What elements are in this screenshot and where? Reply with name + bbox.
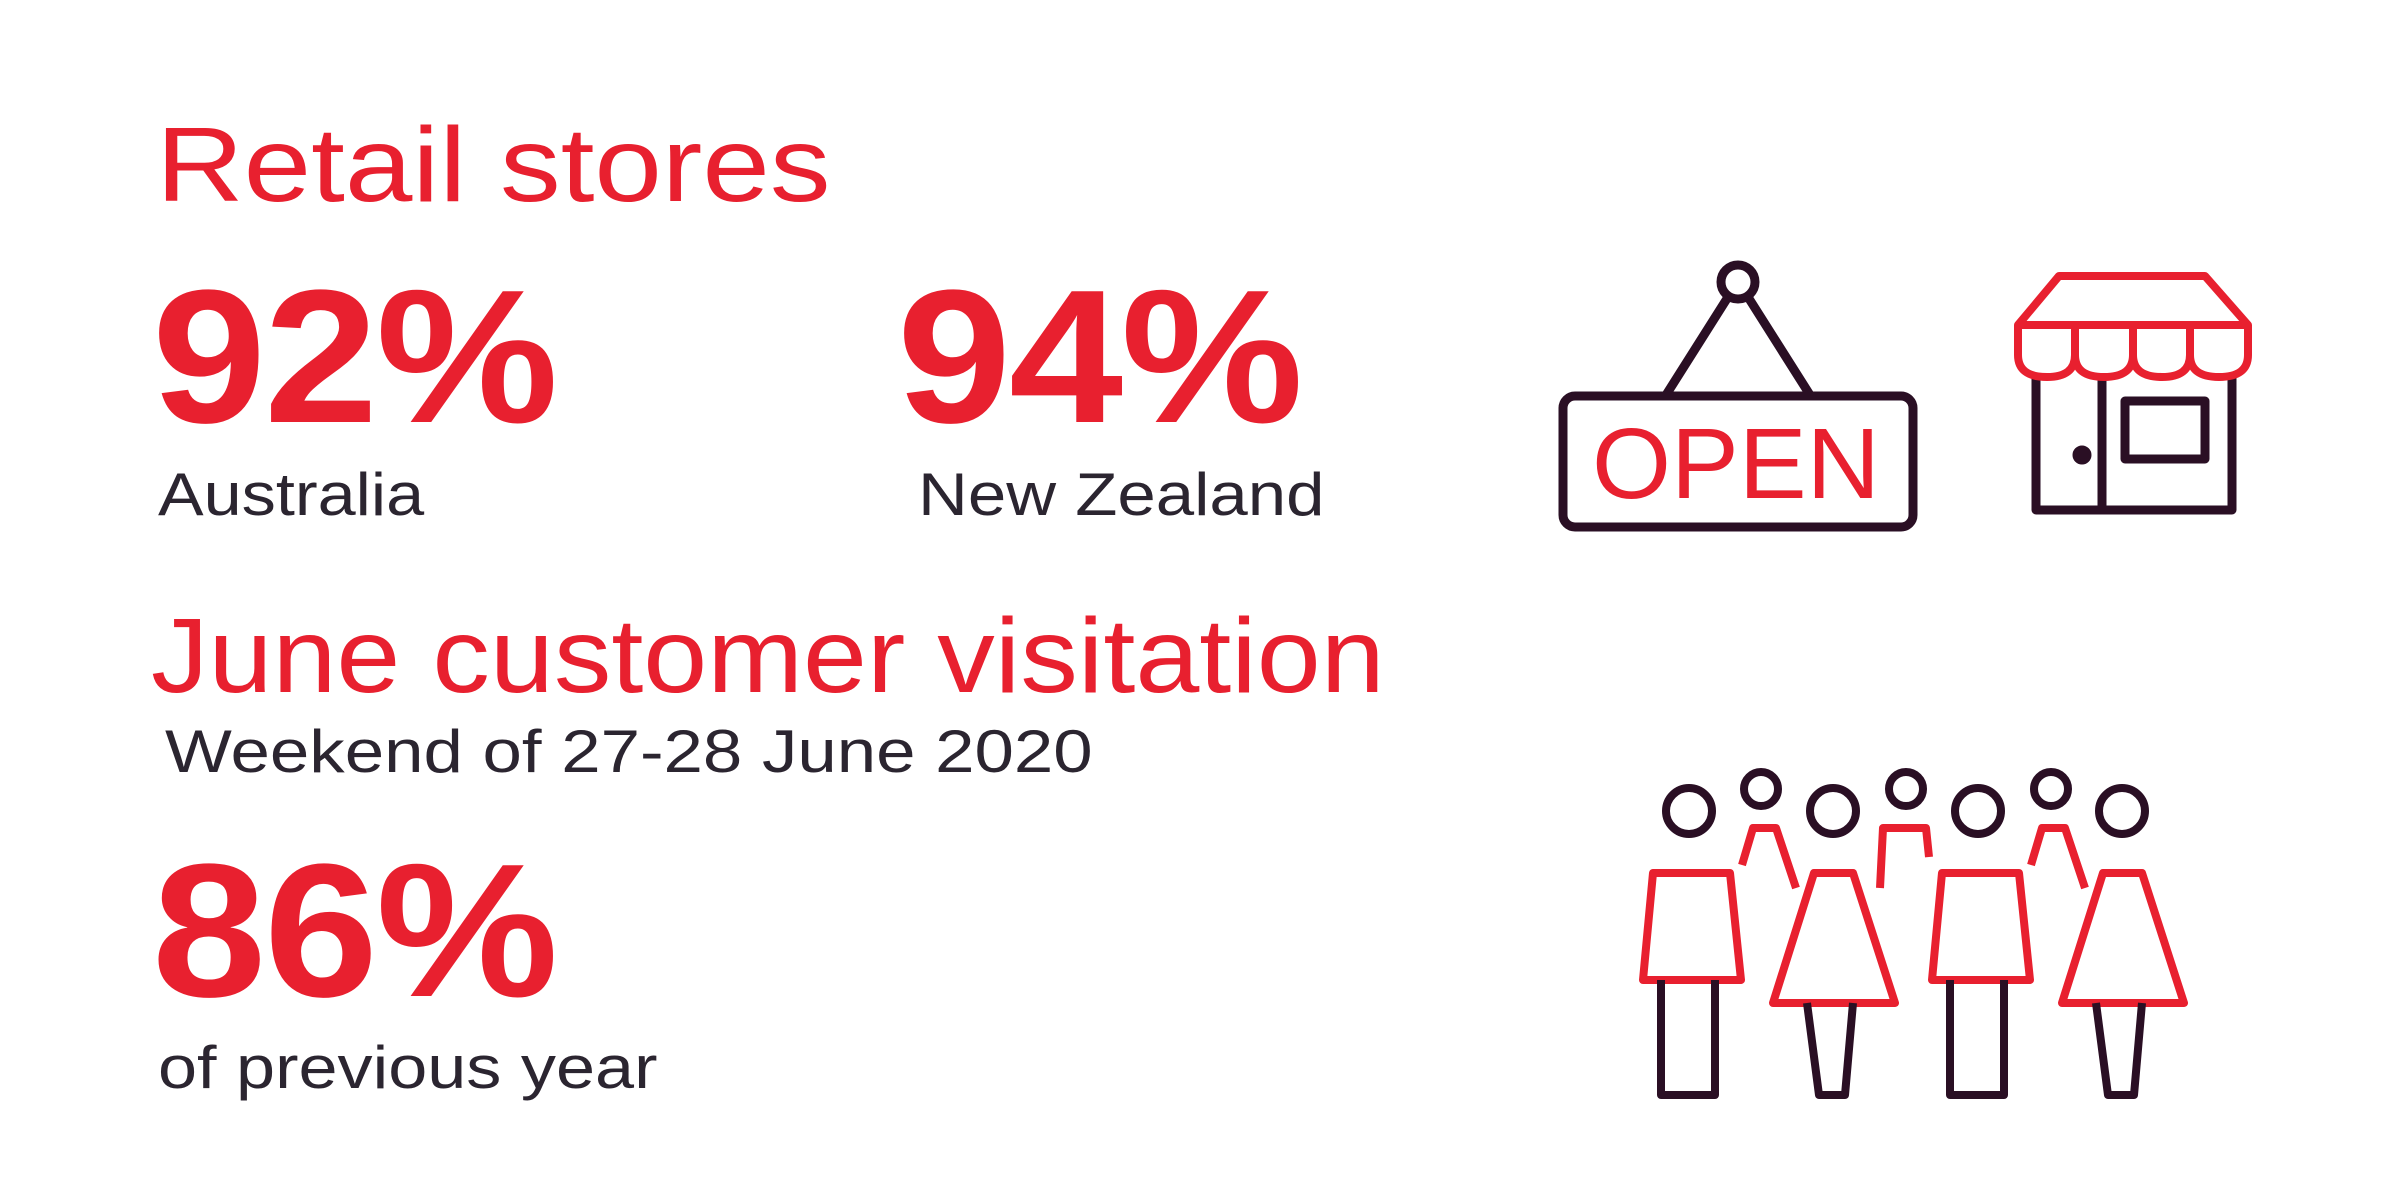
icon: open sign: OPEN: [1592, 408, 1880, 520]
icon: open sign: [1558, 260, 1918, 532]
label of previous year: of previous year: [158, 1034, 657, 1101]
stat: 86% of previous year: [152, 825, 657, 1101]
label Australia: Australia: [158, 461, 424, 528]
stat: New Zealand 94%: [897, 251, 1325, 528]
number 94%: 94%: [897, 251, 1301, 463]
subheading: weekend date: Weekend of 27-28 June 2020: [165, 718, 1093, 785]
label New Zealand: New Zealand: [918, 461, 1325, 528]
heading: June customer visitation: June customer visitation: [151, 597, 1385, 715]
stat: Australia 92%: [152, 251, 556, 528]
number 86%: 86%: [152, 825, 556, 1037]
icon: storefront: [2014, 272, 2252, 514]
number 92%: 92%: [152, 251, 556, 463]
icon: group of people: [1639, 768, 2188, 1099]
heading: retail stores: Retail stores: [156, 106, 831, 224]
